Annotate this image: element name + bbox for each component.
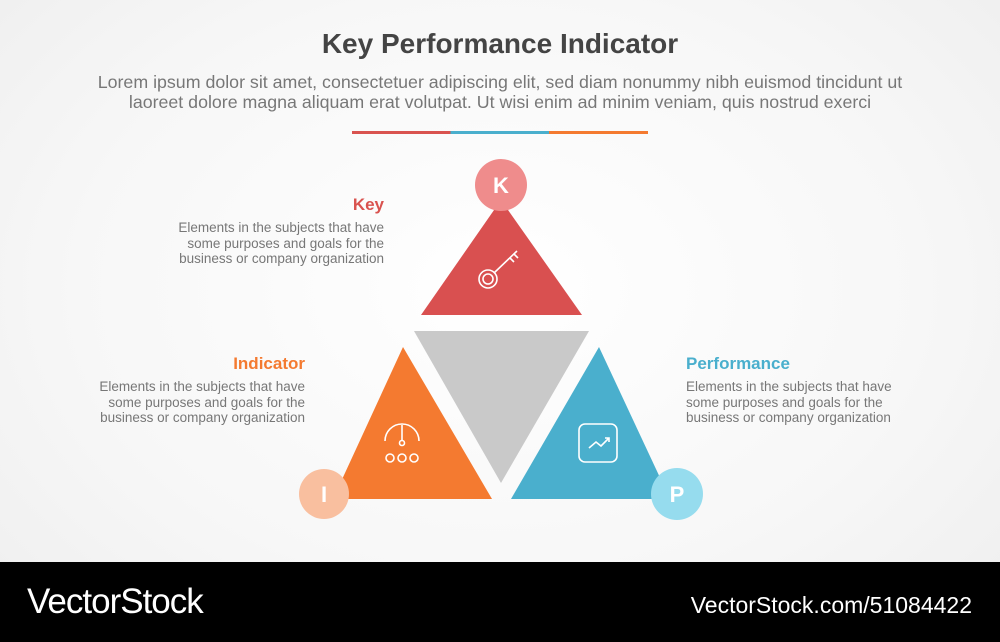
text: Indicator: Elements in the subjects that have xyxy=(99,379,305,394)
subtitle xyxy=(98,72,902,112)
footer id: VectorStock.com/51084422 xyxy=(691,592,972,618)
text: Indicator: some purposes and goals for the xyxy=(108,394,305,410)
triangle: key xyxy=(421,200,582,315)
text: Performance: business or company organization xyxy=(686,410,891,425)
icon: chart xyxy=(579,424,617,462)
heading: Key: Key xyxy=(353,195,384,214)
circle P xyxy=(651,468,703,520)
subtitle: laoreet dolore magna aliquam erat volutpat. Ut wisi enim ad minim veniam, quis nostrud exerci xyxy=(129,92,871,112)
footer brand: VectorStock xyxy=(27,582,203,621)
text: Key xyxy=(178,220,384,266)
triangle: indicator xyxy=(333,347,492,499)
heading: Performance: Performance xyxy=(686,354,790,373)
icon: key xyxy=(479,251,518,288)
text: Performance xyxy=(686,379,892,425)
circle I xyxy=(299,469,349,519)
text: Key: some purposes and goals for the xyxy=(187,236,384,250)
heading: Indicator: Indicator xyxy=(233,354,305,373)
title: Key Performance Indicator xyxy=(322,28,678,59)
text: Indicator xyxy=(99,379,305,425)
text: Indicator: business or company organization xyxy=(100,410,305,425)
text: Key: business or company organization xyxy=(179,251,384,266)
underline bars xyxy=(352,131,648,134)
footer xyxy=(0,562,1000,642)
triangle: gray xyxy=(414,331,589,483)
text: Performance: Elements in the subjects that have xyxy=(686,379,892,394)
triangle: performance xyxy=(511,347,670,499)
icon: gauge xyxy=(385,424,419,462)
subtitle: Lorem ipsum dolor sit amet, consectetuer adipiscing elit, sed diam nonummy nibh euismod tincidunt ut xyxy=(98,72,902,92)
circle K: K xyxy=(493,173,509,198)
circle I: I xyxy=(321,482,327,507)
circle P: P xyxy=(670,482,684,507)
circle K xyxy=(475,159,527,211)
text: Performance: some purposes and goals for the xyxy=(686,394,883,410)
text: Key: Elements in the subjects that have xyxy=(178,220,384,235)
